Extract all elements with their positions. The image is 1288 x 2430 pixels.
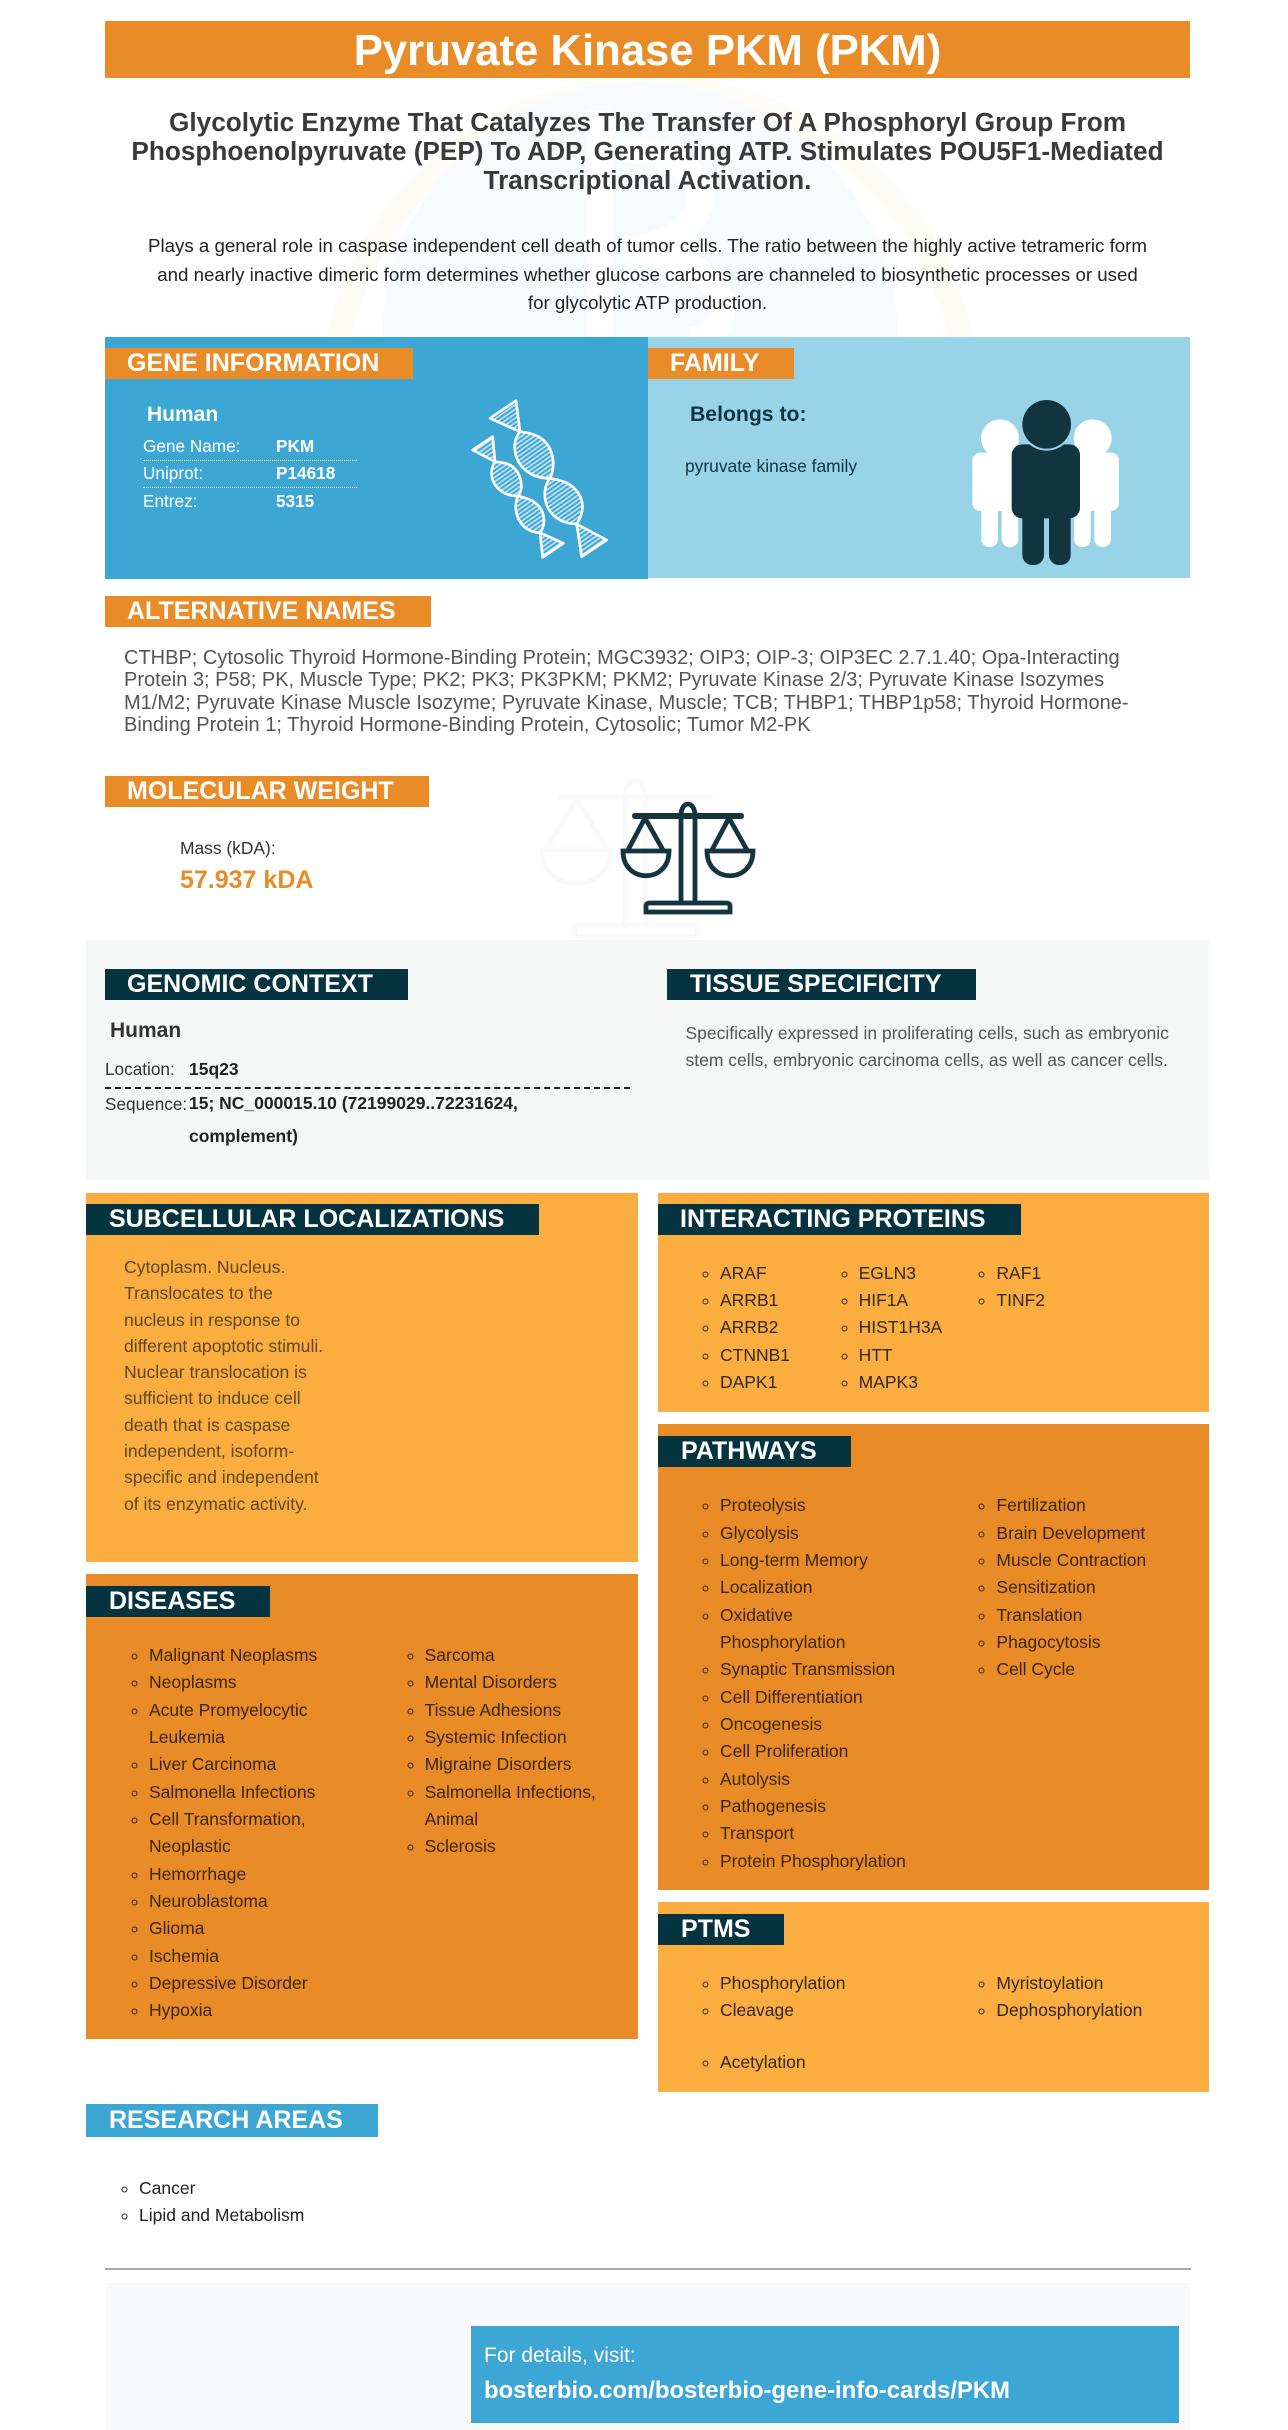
sequence row: Sequence: [105, 1094, 187, 1114]
icon: faint scale watermark [530, 770, 730, 940]
diseases list column 1 [132, 1645, 317, 2020]
PTMs list column 1: Phosphorylation [720, 1973, 846, 1993]
proteins list column 2: HIF1A [859, 1290, 908, 1310]
heading: family [648, 348, 794, 379]
proteins list column 2: HIST1H3A [859, 1317, 942, 1337]
entrez row: 5315 [276, 491, 314, 511]
pathways list column 1: Oxidative [720, 1605, 793, 1625]
pathways list column 1 [702, 1495, 906, 1871]
proteins list column 1: DAPK1 [720, 1372, 777, 1392]
pathways list column 2: Sensitization [996, 1577, 1096, 1597]
proteins list column 2 [842, 1263, 942, 1392]
species label: Human [147, 403, 218, 426]
uniprot row: Uniprot: [143, 463, 203, 483]
diseases list column 1: Cell Transformation, [149, 1809, 306, 1829]
panel: genomic context and tissue specificity [86, 940, 1209, 1180]
uniprot row: P14618 [276, 463, 335, 483]
PTMs list column 2 [978, 1973, 1142, 2020]
alternative names text: Protein 3; P58; PK, Muscle Type; PK2; PK3; PK3PKM; PKM2; Pyruvate Kinase 2/3; Pyruvate Kinase Isozymes [124, 669, 1104, 691]
tissue specificity text: Specifically expressed in proliferating cells, such as embryonic [686, 1023, 1169, 1043]
description: for glycolytic ATP production. [528, 292, 767, 313]
diseases list column 1: Malignant Neoplasms [149, 1645, 317, 1665]
localization text: death that is caspase [124, 1415, 290, 1435]
pathways list column 2 [978, 1495, 1146, 1679]
subtitle: Glycolytic Enzyme That Catalyzes The Transfer Of A Phosphoryl Group From [169, 107, 1126, 137]
diseases list column 1: Depressive Disorder [149, 1973, 308, 1993]
localization text: Nuclear translocation is [124, 1362, 307, 1382]
localization text: nucleus in response to [124, 1310, 300, 1330]
url: bosterbio.com/bosterbio-gene-info-cards/PKM [484, 2377, 1010, 2404]
proteins list column 1: CTNNB1 [720, 1345, 790, 1365]
pathways list column 1: Pathogenesis [720, 1796, 826, 1816]
diseases list column 1: Hemorrhage [149, 1864, 246, 1884]
heading: PTMs: PTMS [681, 1915, 750, 1943]
pathways list column 2: Translation [996, 1605, 1082, 1625]
heading: molecular weight: MOLECULAR WEIGHT [127, 777, 394, 805]
proteins list column 1: ARAF [720, 1263, 767, 1283]
heading: family: FAMILY [670, 349, 759, 377]
heading: diseases: DISEASES [109, 1587, 235, 1615]
heading: research areas [86, 2104, 378, 2137]
location row [105, 1057, 630, 1089]
localization text: specific and independent [124, 1467, 319, 1487]
call to action: For details, visit: [484, 2344, 636, 2367]
PTMs list column 2: Myristoylation [996, 1973, 1103, 1993]
sequence row: complement) [189, 1126, 298, 1146]
diseases list column 1: Acute Promyelocytic [149, 1700, 308, 1720]
diseases list column 1: Hypoxia [149, 2000, 212, 2020]
entrez row: Entrez: [143, 491, 197, 511]
heading: research areas: RESEARCH AREAS [109, 2106, 343, 2134]
panel: diseases [86, 1574, 638, 2039]
diseases list column 1: Neoplasms [149, 1672, 237, 1692]
alternative names text: Binding Protein 1; Thyroid Hormone-Binding Protein, Cytosolic; Tumor M2-PK [124, 714, 811, 736]
heading: gene information: GENE INFORMATION [127, 349, 379, 377]
callout: details link [471, 2326, 1179, 2423]
PTMs list column 2: Dephosphorylation [996, 2000, 1142, 2020]
diseases list column 1: Ischemia [149, 1946, 219, 1966]
PTMs list column 1: Acetylation [720, 2052, 806, 2072]
diseases list column 2: Tissue Adhesions [425, 1700, 561, 1720]
diseases list column 2: Migraine Disorders [425, 1754, 571, 1774]
proteins list column 2: MAPK3 [859, 1372, 918, 1392]
diseases list column 1: Neoplastic [149, 1836, 231, 1856]
pathways list column 1: Glycolysis [720, 1523, 799, 1543]
proteins list column 3: TINF2 [996, 1290, 1045, 1310]
icon: DNA helix [471, 399, 608, 559]
heading: pathways: PATHWAYS [681, 1437, 817, 1465]
icon: people [972, 400, 1119, 565]
uniprot row [143, 461, 357, 488]
diseases list column 1: Leukemia [149, 1727, 225, 1747]
panel: family [648, 337, 1190, 578]
location row: Location: [105, 1059, 175, 1079]
research areas list: Lipid and Metabolism [139, 2205, 304, 2225]
pathways list column 2: Muscle Contraction [996, 1550, 1146, 1570]
pathways list column 2: Brain Development [996, 1523, 1145, 1543]
localization text: of its enzymatic activity. [124, 1494, 307, 1514]
heading: interacting proteins: INTERACTING PROTEINS [680, 1205, 986, 1233]
pathways list column 1: Cell Differentiation [720, 1687, 863, 1707]
gene name row: Gene Name: [143, 436, 240, 456]
diseases list column 2: Salmonella Infections, [425, 1782, 596, 1802]
subtitle: Phosphoenolpyruvate (PEP) To ADP, Generating ATP. Stimulates POU5F1-Mediated [131, 136, 1164, 166]
diseases list column 2 [408, 1645, 596, 1856]
heading: pathways [658, 1436, 851, 1467]
diseases list column 2: Sarcoma [425, 1645, 495, 1665]
subtitle [131, 107, 1164, 195]
heading: subcellular localizations: SUBCELLULAR LOCALIZATIONS [109, 1205, 504, 1233]
pathways list column 2: Phagocytosis [996, 1632, 1100, 1652]
pathways list column 2: Cell Cycle [996, 1659, 1075, 1679]
entrez row [143, 491, 314, 511]
panel: gene information [105, 337, 648, 579]
pathways list column 1: Transport [720, 1823, 794, 1843]
title banner [105, 21, 1190, 78]
title banner: Pyruvate Kinase PKM (PKM) [354, 26, 941, 75]
pathways list column 1: Proteolysis [720, 1495, 806, 1515]
localization text: Translocates to the [124, 1283, 273, 1303]
icon: balance scale [620, 802, 756, 914]
pathways list column 1: Phosphorylation [720, 1632, 846, 1652]
pathways list column 1: Synaptic Transmission [720, 1659, 895, 1679]
proteins list column 1: ARRB1 [720, 1290, 778, 1310]
belongs to label: Belongs to: [690, 403, 807, 426]
alternative names text [124, 647, 1128, 736]
localization text [124, 1257, 323, 1514]
heading: tissue specificity: TISSUE SPECIFICITY [690, 970, 941, 998]
research areas list [122, 2178, 304, 2225]
gene name row [143, 434, 357, 461]
heading: diseases [86, 1586, 270, 1617]
proteins list column 1: ARRB2 [720, 1317, 778, 1337]
sequence row: 15; NC_000015.10 (72199029..72231624, [189, 1093, 518, 1113]
proteins list column 1 [702, 1263, 790, 1392]
panel: interacting proteins [658, 1193, 1209, 1412]
description: Plays a general role in caspase independent cell death of tumor cells. The ratio between the highly active tetrameric form [148, 235, 1147, 256]
localization text: Cytoplasm. Nucleus. [124, 1257, 285, 1277]
diseases list column 1: Liver Carcinoma [149, 1754, 276, 1774]
diseases list column 2: Animal [425, 1809, 478, 1829]
panel: footer [105, 2283, 1191, 2430]
tissue specificity text [686, 1023, 1169, 1070]
diseases list column 1: Glioma [149, 1918, 204, 1938]
localization text: sufficient to induce cell [124, 1388, 301, 1408]
diseases list column 1: Neuroblastoma [149, 1891, 268, 1911]
pathways list column 1: Localization [720, 1577, 812, 1597]
panel: PTMs [658, 1902, 1209, 2092]
diseases list column 2: Systemic Infection [425, 1727, 567, 1747]
gene name row: PKM [276, 436, 314, 456]
pathways list column 1: Long-term Memory [720, 1550, 868, 1570]
description [148, 235, 1147, 313]
localization text: different apoptotic stimuli. [124, 1336, 323, 1356]
mass value: 57.937 kDA [180, 866, 313, 894]
description: and nearly inactive dimeric form determines whether glucose carbons are channeled to biosynthetic processes or used [157, 264, 1138, 284]
heading: PTMs [658, 1914, 784, 1945]
proteins list column 2: EGLN3 [859, 1263, 916, 1283]
panel: subcellular localizations [86, 1193, 638, 1562]
pathways list column 1: Cell Proliferation [720, 1741, 848, 1761]
PTMs list column 1 [702, 1973, 846, 2072]
mass label: Mass (kDA): [180, 838, 276, 858]
proteins list column 3 [978, 1263, 1045, 1310]
PTMs list column 1: Cleavage [720, 2000, 794, 2020]
panel: pathways [658, 1424, 1209, 1890]
proteins list column 2: HTT [859, 1345, 893, 1365]
subtitle: Transcriptional Activation. [484, 165, 811, 195]
location row: 15q23 [189, 1059, 239, 1079]
pathways list column 1: Autolysis [720, 1769, 790, 1789]
heading: genomic context: GENOMIC CONTEXT [127, 970, 373, 998]
diseases list column 2: Mental Disorders [425, 1672, 557, 1692]
family name: pyruvate kinase family [685, 456, 857, 476]
research areas list: Cancer [139, 2178, 195, 2198]
background watermark logo [328, 78, 972, 337]
proteins list column 3: RAF1 [996, 1263, 1041, 1283]
sequence row [105, 1093, 518, 1146]
alternative names text: M1/M2; Pyruvate Kinase Muscle Isozyme; Pyruvate Kinase, Muscle; TCB; THBP1; THBP1p58; Thyroid Hormone- [124, 692, 1128, 714]
diseases list column 2: Sclerosis [425, 1836, 496, 1856]
alternative names text: CTHBP; Cytosolic Thyroid Hormone-Binding Protein; MGC3932; OIP3; OIP-3; OIP3EC 2.7.1.40; Opa-Interacting [124, 647, 1120, 669]
species label: Human [110, 1019, 181, 1042]
diseases list column 1: Salmonella Infections [149, 1782, 315, 1802]
pathways list column 1: Protein Phosphorylation [720, 1851, 906, 1871]
pathways list column 2: Fertilization [996, 1495, 1086, 1515]
localization text: independent, isoform- [124, 1441, 294, 1461]
heading: alternative names: ALTERNATIVE NAMES [127, 597, 396, 625]
tissue specificity text: stem cells, embryonic carcinoma cells, as well as cancer cells. [686, 1050, 1168, 1070]
pathways list column 1: Oncogenesis [720, 1714, 822, 1734]
